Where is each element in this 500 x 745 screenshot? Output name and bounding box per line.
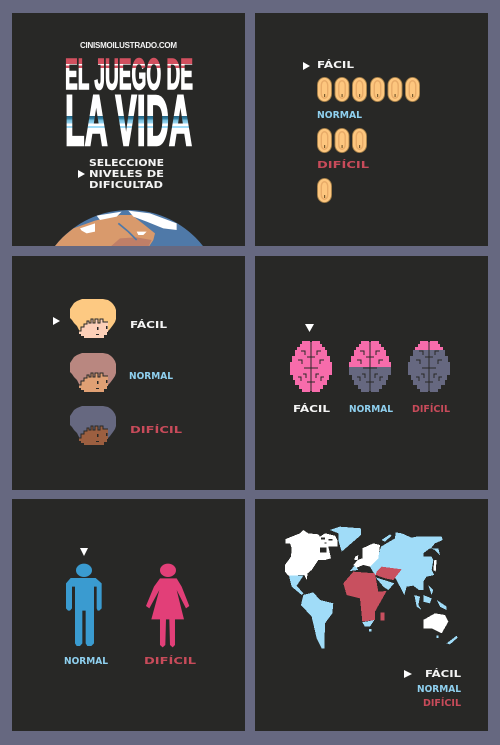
character: grey hair, dark skin: [70, 406, 116, 445]
panel: gender: [12, 499, 245, 731]
label: easy: FÁCIL: [317, 59, 354, 71]
three coins: [317, 128, 367, 153]
menu text: DIFICULTAD: [89, 180, 163, 191]
label: hard: DIFÍCIL: [423, 697, 461, 709]
icon: planet earth: [55, 210, 203, 246]
menu text: SELECCIONE: [89, 158, 164, 169]
icon: menu arrow: [78, 170, 85, 178]
menu text: NIVELES DE: [89, 169, 164, 180]
brain: full pink: [290, 341, 332, 392]
label: hard: DIFÍCIL: [412, 403, 450, 415]
panel: characters by skin colour: [12, 256, 245, 490]
menu text: [89, 158, 164, 191]
figure: woman: [146, 564, 189, 647]
icon: selector arrow: [303, 62, 310, 70]
icon: selector arrow: [305, 324, 314, 332]
label: normal: NORMAL: [317, 110, 362, 121]
panel: title screen: EL JUEGO DE: [65, 50, 193, 99]
region: white countries: [285, 530, 448, 633]
region: red countries: [343, 567, 402, 622]
figure: man: [66, 564, 102, 646]
brain: mostly grey: [408, 341, 450, 392]
icon: selector arrow: [53, 317, 60, 325]
title: El juego de la vida: [65, 50, 193, 161]
label: normal: NORMAL: [129, 371, 173, 382]
website credit: CINISMOILUSTRADO.COM: [80, 41, 177, 50]
label: normal: NORMAL: [349, 404, 393, 415]
character: blond, light skin: [70, 299, 116, 338]
icon: selector arrow: [80, 548, 88, 556]
icon: selector arrow: [404, 670, 412, 678]
label: hard: DIFÍCIL: [317, 159, 369, 171]
brain: half pink: [349, 341, 391, 392]
label: normal: NORMAL: [417, 684, 461, 695]
panel: world map: [255, 499, 488, 731]
panel: coins: [255, 13, 488, 246]
label: easy: FÁCIL: [130, 319, 167, 331]
six coins: [317, 77, 420, 102]
panel: title screen: LA VIDA: [65, 82, 192, 161]
world map: [285, 527, 458, 648]
panel: brains: [255, 256, 488, 490]
panel: title screen: [12, 13, 245, 246]
region: blue countries: [289, 527, 458, 648]
label: hard: DIFÍCIL: [144, 655, 196, 667]
label: normal: NORMAL: [64, 656, 108, 667]
character: brown hair, tan skin: [70, 353, 116, 392]
label: easy: FÁCIL: [293, 403, 330, 415]
label: easy: FÁCIL: [425, 668, 461, 680]
label: hard: DIFÍCIL: [130, 424, 182, 436]
one coin: [317, 178, 332, 203]
